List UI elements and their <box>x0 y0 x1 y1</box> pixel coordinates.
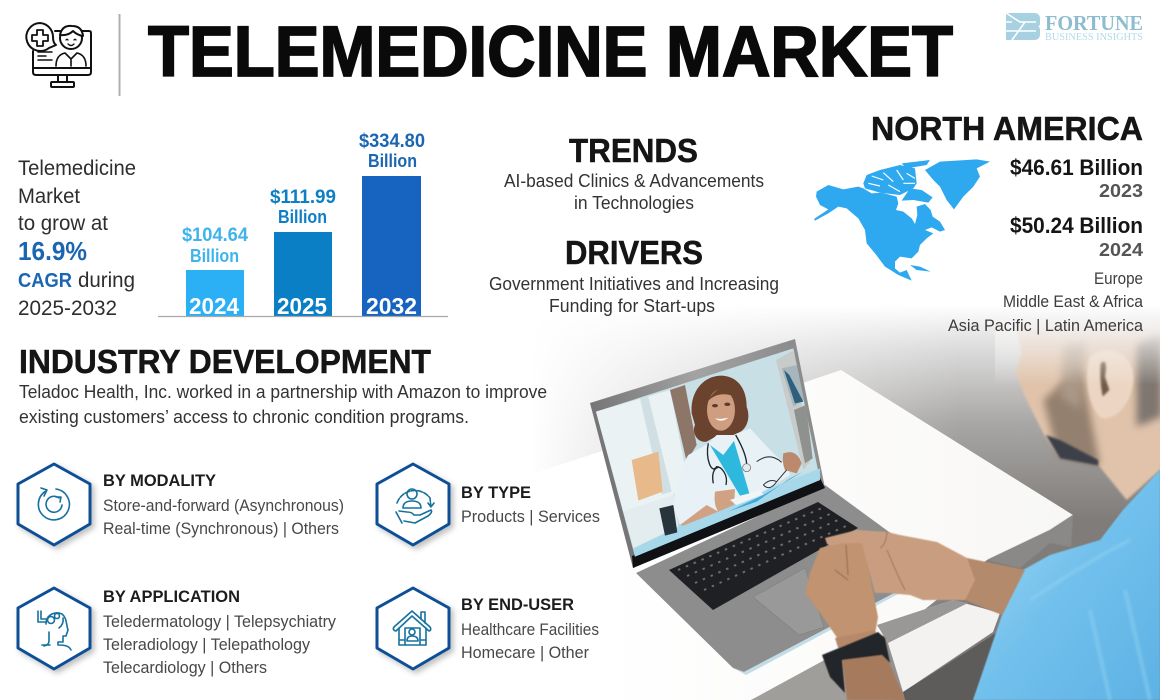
text block: market growth: Market <box>18 185 80 208</box>
icon: cycle arrows <box>38 488 69 520</box>
keyboard <box>669 502 858 610</box>
panel: trends: TRENDS <box>569 132 698 169</box>
segment: by end-user: BY END-USER <box>461 595 574 614</box>
window <box>596 390 687 512</box>
segment: by modality: Store-and-forward (Asynchronous) <box>103 496 344 515</box>
icon: house with person <box>393 611 431 645</box>
bar chart: market size: 2024 <box>189 293 239 319</box>
segment: by application: BY APPLICATION <box>103 587 240 606</box>
panel: regional figures: 2023 <box>1099 181 1143 201</box>
text block: market growth: Telemedicine <box>18 157 136 180</box>
laptop lid <box>590 339 825 568</box>
panel: industry development: existing customers’ access to chronic condition programs. <box>19 407 469 427</box>
map: North America <box>814 159 990 281</box>
panel: drivers: Government Initiatives and Increasing <box>489 274 779 294</box>
icon: hand holding person <box>396 489 434 523</box>
man's shirt <box>973 470 1160 700</box>
bar chart: market size: Billion <box>368 151 417 171</box>
segment: by end-user: Healthcare Facilities <box>461 620 599 639</box>
panel: regional figures: NORTH AMERICA <box>871 110 1143 147</box>
text block: market growth: 16.9% <box>18 236 87 266</box>
bar chart: market size: Billion <box>278 207 327 227</box>
segment: by modality: Real-time (Synchronous) | Others <box>103 519 339 538</box>
logo: Fortune Business Insights: FORTUNE <box>1045 11 1143 35</box>
panel: regional figures: $50.24 Billion <box>1010 213 1143 238</box>
logo: Fortune Business Insights: BUSINESS INSIGHTS <box>1045 32 1143 43</box>
text block: market growth: 2025-2032 <box>18 297 117 320</box>
text block: market growth: during <box>78 269 135 292</box>
trackpad <box>753 568 824 635</box>
panel: drivers: DRIVERS <box>565 234 703 271</box>
panel: regional figures: Middle East & Africa <box>1003 292 1143 311</box>
segment: by application: Telecardiology | Others <box>103 658 267 677</box>
segment: by modality <box>18 464 344 545</box>
ear <box>1087 350 1133 418</box>
panel: industry development: INDUSTRY DEVELOPMENT <box>19 343 431 380</box>
segment: by application: Teledermatology | Telepsychiatry <box>103 612 336 631</box>
panel: regional figures <box>871 110 1144 335</box>
segment: by type <box>377 464 600 545</box>
photo: man on a video call with a doctor on a laptop <box>470 305 1160 700</box>
bar chart: market size: $111.99 <box>270 187 336 208</box>
panel: regional figures: $46.61 Billion <box>1010 155 1143 180</box>
segment: by end-user: Homecare | Other <box>461 643 589 662</box>
panel: regional figures: Asia Pacific | Latin America <box>948 316 1144 335</box>
text block: market growth: CAGR <box>18 270 73 292</box>
panel: drivers: Funding for Start-ups <box>549 296 715 316</box>
text block: market growth: to grow at <box>18 212 108 235</box>
segment: by end-user <box>377 588 599 669</box>
shelf <box>776 350 810 470</box>
watch <box>822 632 890 693</box>
logo: Fortune Business Insights <box>1006 11 1143 43</box>
doctor <box>673 376 803 526</box>
icon: telemedicine monitor with doctor <box>26 23 91 87</box>
text block: market growth <box>18 157 136 320</box>
bar chart: market size: $104.64 <box>182 225 248 246</box>
panel: trends: AI-based Clinics & Advancements <box>504 171 764 191</box>
panel: industry development: Teladoc Health, Inc. worked in a partnership with Amazon to improve <box>19 382 547 402</box>
table edges <box>987 515 1073 568</box>
bar chart: market size: Billion <box>190 246 239 266</box>
panel: trends <box>504 132 764 213</box>
panel: industry development <box>19 343 547 427</box>
bar chart: market size: 2032 <box>366 293 417 319</box>
segment: by application <box>18 587 336 677</box>
desk <box>633 468 820 557</box>
segment: by type: Products | Services <box>461 507 600 526</box>
man's head and neck <box>1016 323 1160 500</box>
bar chart: market size <box>158 131 448 319</box>
hands and arms <box>805 530 1025 700</box>
laptop screen <box>596 348 820 557</box>
segment: by modality: BY MODALITY <box>103 471 217 490</box>
table top <box>470 370 1073 700</box>
bar chart: market size: 2025 <box>277 293 327 319</box>
panel: regional figures: 2024 <box>1099 240 1143 260</box>
panel: drivers <box>489 234 779 316</box>
title: TELEMEDICINE MARKET <box>148 13 953 92</box>
panel: trends: in Technologies <box>574 193 694 213</box>
laptop base <box>636 485 900 672</box>
orange box <box>632 452 663 501</box>
panel: regional figures: Europe <box>1094 269 1143 288</box>
icon: head with gears <box>38 611 71 650</box>
segment: by type: BY TYPE <box>461 483 531 502</box>
bar chart: market size: $334.80 <box>359 131 425 152</box>
segment: by application: Teleradiology | Telepathology <box>103 635 310 654</box>
